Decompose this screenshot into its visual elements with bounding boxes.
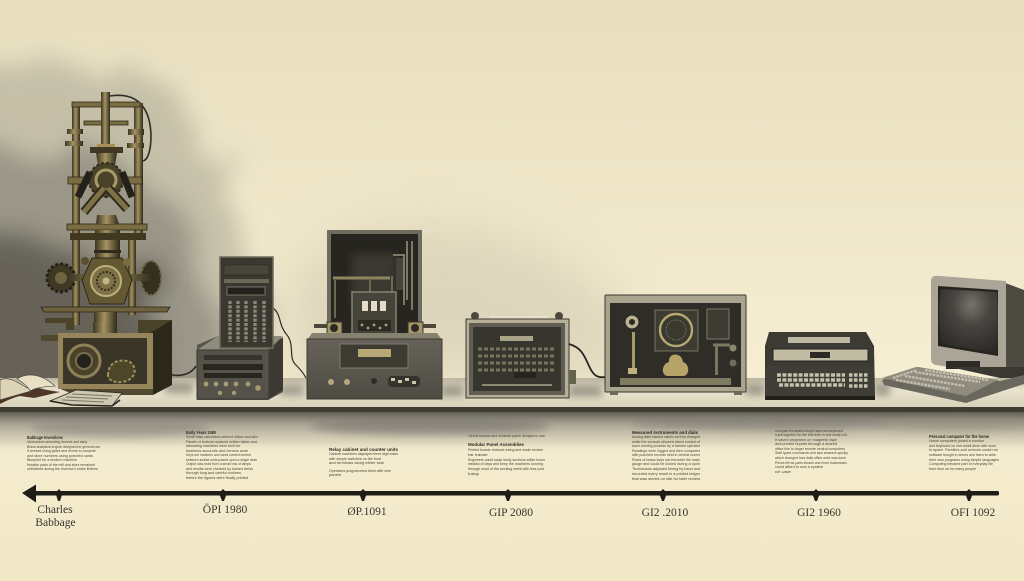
timeline label: 1092: OFI 1092 <box>951 507 995 519</box>
shelf shadow band <box>0 411 1024 453</box>
text block 5: with punched records held in central rooms <box>632 452 700 457</box>
text block 4: through most of the working week with less cost <box>468 466 545 471</box>
text block 4: instead of days and keep the machines running <box>468 461 543 466</box>
base box <box>150 320 172 395</box>
timeline label: 1980: ÖPI 1980 <box>203 502 247 516</box>
timeline markers <box>56 489 973 501</box>
text block 4: Engineers could swap faulty sections within hours <box>468 457 545 462</box>
lower console <box>307 333 442 340</box>
text block 6: It saved programs on magnetic tape <box>775 437 838 442</box>
machine 5: dial console <box>605 295 746 395</box>
top bars <box>67 102 147 230</box>
text block 4 <box>468 433 546 476</box>
text block 2 <box>186 430 258 480</box>
machine 1: Babbage brass engine <box>41 92 196 395</box>
machine 4: circuit panel <box>466 312 605 398</box>
timeline label: Charles Babbage: Babbage <box>35 517 76 529</box>
cable <box>569 344 605 377</box>
machine 7: personal computer and keyboard <box>882 276 1024 403</box>
text block 3: Relay cabinet and counter units <box>329 447 399 452</box>
central spindle <box>101 92 110 157</box>
text block 7: their own programs using simple languages <box>929 457 999 462</box>
text block 5: each running process by a trained operator <box>632 443 701 448</box>
text block 3: Cabinet machines displayed three digit totals <box>329 451 398 456</box>
text block 7: to spare. Families and schools could run <box>929 447 998 452</box>
display unit <box>352 292 396 336</box>
text block 1: Babbage Inventions <box>27 435 64 440</box>
text block 3: with simple switches on the front <box>329 456 382 461</box>
text block 2: Early Years 1980 <box>186 430 217 435</box>
shelf shadows under machines <box>165 384 890 396</box>
text block 2: Small relay calculators entered offices and labs <box>186 434 258 439</box>
text block 4: Circuit boards and modular panel designs in use <box>468 433 546 438</box>
text block 3: and terminals along either side <box>329 460 385 465</box>
screen <box>939 289 998 353</box>
text block 1: Mechanical calculating devices and early <box>27 439 87 444</box>
text block 7: software bought in stores and learn to write <box>929 452 997 457</box>
text block 2: through long and careful routines <box>186 470 241 475</box>
text block 3: panels <box>329 472 341 477</box>
text block 6: which changed how daily office work was done <box>775 455 847 460</box>
text block 6: office line to larger remote central computers <box>775 446 845 451</box>
text block 6: could afford to own a system <box>775 464 824 469</box>
text block 1: Blueprint for a modern machine <box>27 457 78 462</box>
text block 7: Personal computer for the home <box>929 434 990 439</box>
text block 5: Measured instruments and dials <box>632 430 699 435</box>
machine 3: relay cabinet <box>307 230 442 399</box>
text block 6: Prices fell as parts shrank and more businesses <box>775 460 847 465</box>
text block 5: while the console allowed direct control of <box>632 439 701 444</box>
timeline label: 1960: GI2 1960 <box>797 507 841 519</box>
text block 6: and printed reports through a shared <box>775 441 837 446</box>
text block 4: today <box>468 471 479 476</box>
text block 2: business accounts and census work <box>186 448 248 453</box>
text block 7: Home computers joined a monitor <box>929 438 985 443</box>
wooden shelf <box>0 378 1024 412</box>
timeline arrow <box>22 484 999 502</box>
side terminals <box>327 322 342 336</box>
text block 5: Readings were logged and then compared <box>632 448 700 453</box>
text block 7: from then on for many people <box>929 466 977 471</box>
text block 1: It worked using gears and levers to compute <box>27 448 97 453</box>
text block 1: unfinished during the inventor's entire lifetime <box>27 466 99 471</box>
text block 6: input together for the first time in one small unit <box>775 432 848 437</box>
text block 5: Rows of brass keys sat beneath the main <box>632 457 700 462</box>
text block 2: and results were checked by trained clerks <box>186 466 253 471</box>
text block 2: Keys set numbers and wires carried current <box>186 452 252 457</box>
text block 3: Operators programmed them with wire <box>329 468 392 473</box>
text block 1: and store numbers using punched cards <box>27 453 93 458</box>
text block 5 <box>632 430 701 481</box>
base plate <box>41 307 170 312</box>
machine 6: tape terminal <box>765 332 875 400</box>
text block 2: before the figures were finally printed <box>186 475 248 480</box>
text block 5: Technicians adjusted timing by hand and <box>632 466 700 471</box>
cable <box>110 95 196 375</box>
text block 4: far easier <box>468 452 489 457</box>
text block 5: recorded every result in a printed ledger <box>632 471 701 476</box>
text block 2: tabulating machines were built for <box>186 443 241 448</box>
frame columns <box>65 103 144 325</box>
timeline label: 1091: ØP.1091 <box>347 506 387 518</box>
text block 7: Computing became part of everyday life <box>929 461 994 466</box>
text block 1: Notable parts of the mill and store remained <box>27 462 95 467</box>
open book and papers <box>0 375 122 406</box>
text block 6: of use <box>775 469 792 474</box>
text block 7 <box>929 434 999 471</box>
text block 4: Printed boards reduced wiring and made service <box>468 447 544 452</box>
text block 2: Panels of buttons replaced written tables and <box>186 439 257 444</box>
timeline label: Charles Babbage: Charles <box>37 504 73 516</box>
side gears <box>47 264 75 292</box>
text block 5: Analog dials tracked values as they changed <box>632 434 700 439</box>
text block 6 <box>775 428 848 474</box>
text block 5: that was stored on site for later review <box>632 476 700 481</box>
text block 3 <box>329 447 399 477</box>
timeline label: 2080: GIP 2080 <box>489 507 533 519</box>
text block 1: Brass analytical engine designed for general use <box>27 444 101 449</box>
machine 2: calculator tower <box>197 257 306 400</box>
text block 5: gauge and could be locked during a cycle <box>632 461 701 466</box>
text block 6: Compact terminals brought tape and keyboard <box>775 428 843 433</box>
timeline label: 2010: GI2 .2010 <box>642 507 689 519</box>
text block 4: Modular Panel Assemblies <box>468 442 525 447</box>
column <box>96 215 119 224</box>
text block 2: between sealed units placed upon a single desk <box>186 457 257 462</box>
text block 7: and keyboard on one small desk with room <box>929 443 997 448</box>
hub <box>82 258 132 304</box>
text block 1 <box>27 435 101 471</box>
text block 2: Output was read from a small row of lamps <box>186 461 251 466</box>
gear with crossed arms <box>89 163 123 197</box>
cable <box>273 308 306 378</box>
text block 6: Staff typed commands and saw answers quickly <box>775 450 848 455</box>
background: smoke wash <box>0 50 618 378</box>
